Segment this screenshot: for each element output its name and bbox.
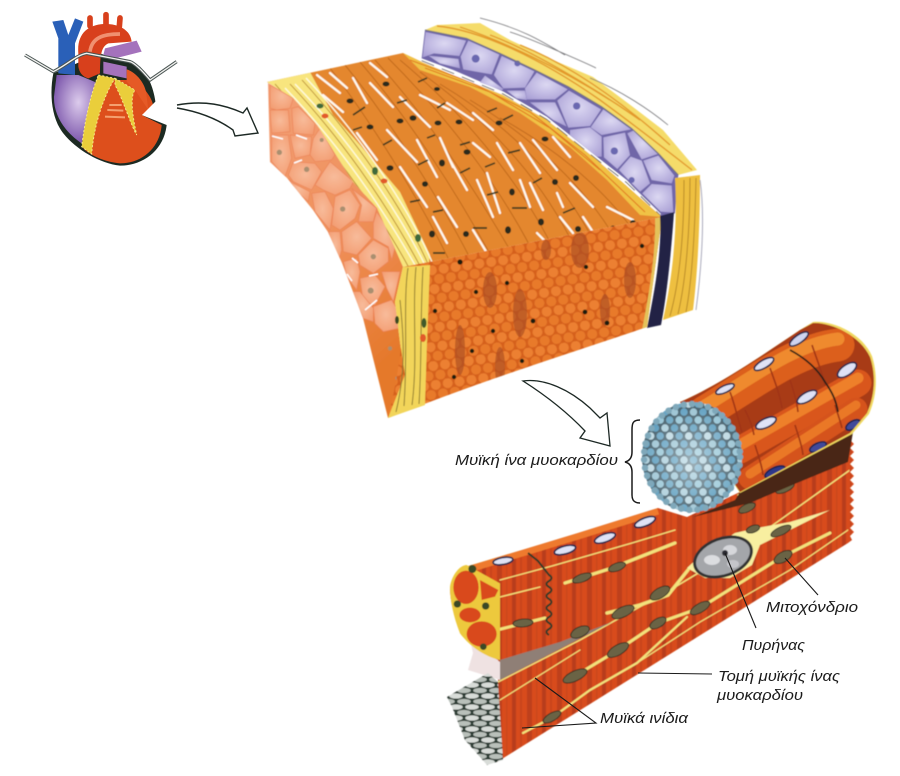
intercalated discs [353, 78, 575, 253]
left auricle [127, 69, 148, 110]
lower yellow band [388, 265, 430, 418]
aorta [78, 24, 132, 78]
arrow: heart to wall block [142, 97, 258, 136]
coronary fat yellow [82, 75, 137, 154]
ventricle highlight stripes [105, 105, 125, 117]
front nuclei [433, 244, 644, 379]
right yellow edge [642, 217, 662, 329]
label: mitochondrion: Μιτοχόνδριο [766, 600, 858, 616]
arrow: block to muscle fibre [523, 381, 610, 446]
grey cut plane [500, 622, 612, 680]
fibre striations [330, 58, 630, 262]
label: muscle fibre: Μυϊκή ίνα μυοκαρδίου [455, 453, 618, 469]
fibre clefts [317, 63, 633, 253]
blue nuclei [714, 329, 862, 481]
cut end of fibre [642, 402, 742, 512]
label: section of muscle fibre: Τομή μυϊκής ίνας [718, 669, 841, 685]
myofibril end [447, 673, 503, 765]
left endocardium cell face [267, 82, 404, 418]
heart wall block [260, 18, 703, 425]
left fibre end [450, 565, 500, 660]
ventricle [83, 80, 162, 163]
muscle fibre illustration [447, 318, 880, 765]
outer yellow epicardium fibres [425, 18, 697, 175]
surface highlight [466, 511, 658, 570]
capillaries [316, 104, 324, 108]
heart outline [51, 53, 167, 166]
nuclei on lower fibre surface [493, 514, 657, 566]
pulmonary artery [103, 41, 142, 78]
label: section of muscle fibre: μυοκαρδίου [716, 688, 803, 704]
right yellow fibrous band [403, 53, 662, 217]
label: nucleus: Πυρήνας [742, 638, 806, 654]
endothelium purple cells [422, 30, 678, 217]
label: myofibrils [522, 678, 689, 728]
left cut membrane [468, 640, 500, 680]
cell nuclei [277, 138, 399, 380]
yellow sarcoplasm channels [497, 440, 850, 733]
right yellow cut band [663, 175, 700, 320]
upper fibre cylinder [642, 318, 880, 512]
pericardium clamps [25, 53, 177, 80]
cell highlights [272, 135, 378, 310]
top face muscle fibres [260, 50, 670, 275]
label: muscle fibre [455, 420, 640, 503]
sarcolemma wavy edge [528, 553, 552, 635]
nuclei [346, 81, 636, 238]
dark shadow under cylinder [693, 432, 853, 517]
label: myofibrils: Μυϊκά ινίδια [600, 711, 689, 727]
yellow space around nucleus [687, 510, 830, 578]
lower slab sectioned fibre [450, 440, 854, 762]
brace [625, 420, 640, 503]
right atrium [54, 75, 98, 143]
left yellow fibrous band [267, 72, 430, 268]
label: mitochondrion [766, 558, 858, 616]
mitochondria [513, 480, 796, 725]
heart illustration [25, 15, 177, 166]
segment lines [730, 345, 842, 475]
vena cava [52, 18, 83, 75]
myocardium-endocardium dark band [647, 212, 674, 328]
front face cut cells [388, 216, 662, 418]
label: nucleus [725, 553, 806, 654]
nucleus [687, 528, 759, 586]
darker connective smears [455, 232, 636, 387]
label: section of muscle fibre [638, 669, 841, 704]
